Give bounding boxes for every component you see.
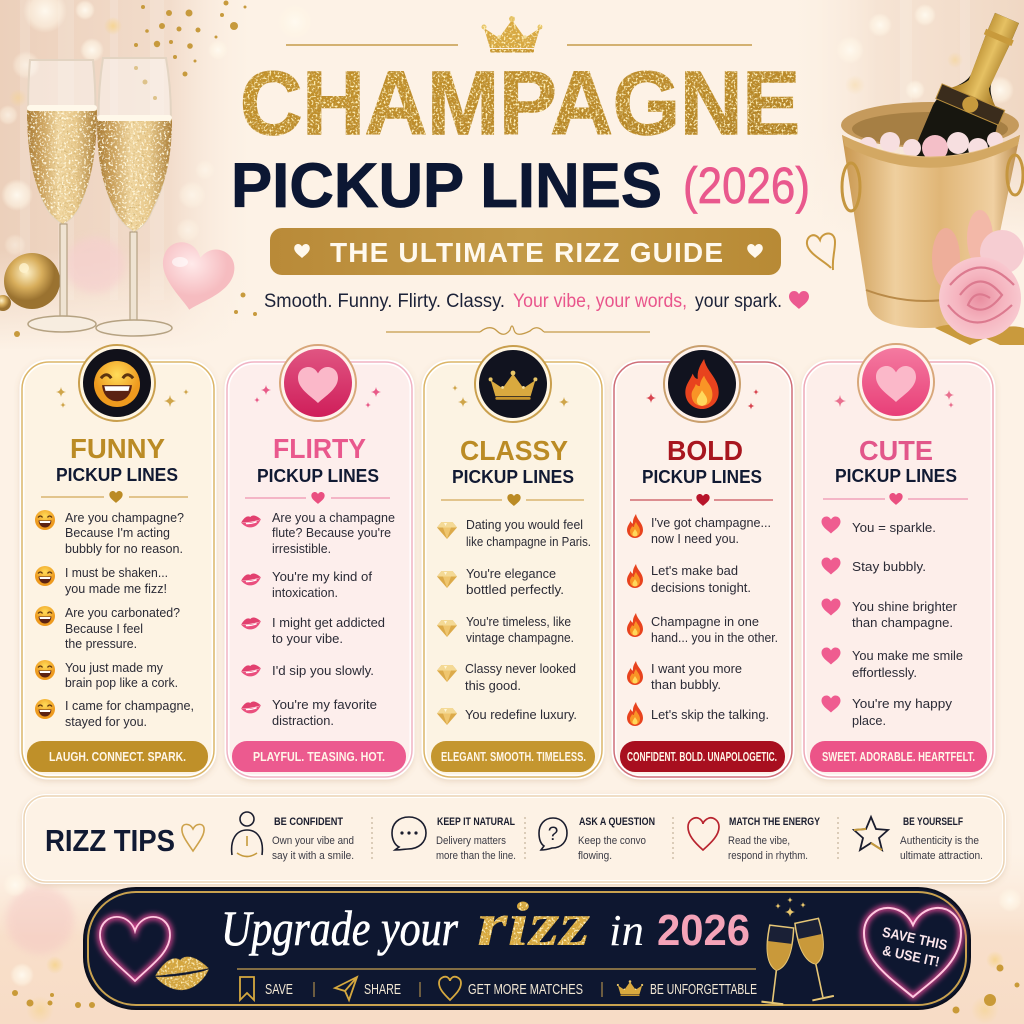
tip: keep it natural: more than the line.	[436, 850, 516, 862]
tip: keep it natural: Delivery matters	[436, 835, 506, 847]
classy heading: CLASSY	[460, 435, 568, 466]
bold lines	[627, 514, 778, 726]
icon: left neon heart	[100, 917, 170, 981]
bold lines: Let's make bad	[651, 563, 738, 578]
gold ornament ball	[0, 253, 60, 311]
cute lines: effortlessly.	[852, 665, 917, 680]
cute lines: Stay bubbly.	[852, 559, 926, 574]
flirty lines: intoxication.	[272, 585, 338, 600]
bold badge icon	[664, 346, 740, 422]
panel: cute	[804, 344, 993, 777]
funny lines: You just made my	[65, 660, 163, 675]
pink blob	[65, 237, 125, 293]
icon: right neon heart with callout	[864, 908, 961, 997]
tip: be confident: Own your vibe and	[272, 835, 354, 847]
flirty divider	[245, 492, 390, 504]
icon: right neon heart with callout: SAVE THIS	[881, 924, 949, 953]
title decorative rules	[286, 44, 752, 46]
tip: keep it natural	[392, 816, 516, 862]
tip: ask a question	[539, 816, 655, 862]
classy footer pill: ELEGANT. SMOOTH. TIMELESS.	[441, 749, 586, 764]
cute badge icon	[858, 344, 934, 420]
cute lines	[822, 516, 963, 728]
tip: be confident: BE CONFIDENT	[274, 816, 343, 828]
flirty footer pill	[232, 741, 406, 772]
panel: funny	[22, 345, 214, 777]
tip: ask a question: flowing.	[578, 850, 612, 862]
banner headline: rizz: rizz	[477, 891, 590, 959]
cute lines: You're my happy	[852, 696, 953, 711]
tagline	[264, 291, 809, 312]
cute lines: You make me smile	[852, 648, 963, 663]
banner action: save	[240, 977, 293, 1000]
funny badge icon	[79, 345, 155, 421]
icon: pink glass heart	[154, 239, 238, 317]
classy lines: Dating you would feel	[466, 517, 583, 532]
banner headline: year: 2026	[657, 906, 750, 955]
classy lines: this good.	[465, 678, 521, 693]
classy lines: vintage champagne.	[466, 630, 574, 645]
champagne flutes	[27, 58, 172, 336]
bold subheading: PICKUP LINES	[642, 467, 762, 487]
banner action: get more matches: GET MORE MATCHES	[468, 981, 583, 998]
title: pickup lines: PICKUP LINES	[231, 151, 662, 221]
classy lines	[437, 517, 591, 725]
icon: right neon heart with callout: & USE IT!	[881, 942, 941, 970]
tip dividers	[372, 817, 838, 860]
banner action: share: SHARE	[364, 981, 401, 998]
classy sparkles	[452, 385, 569, 407]
icon: gold outline heart	[807, 234, 835, 270]
funny sparkles	[56, 387, 189, 408]
flirty lines: irresistible.	[272, 541, 331, 556]
bold footer pill	[620, 741, 785, 772]
bold divider	[630, 494, 773, 506]
banner headline: in: in	[609, 906, 644, 955]
ice bucket with bottle and roses	[841, 5, 1024, 345]
panel: upgrade banner	[84, 888, 970, 1009]
tip: be yourself: Authenticity is the	[900, 835, 979, 847]
bold lines: hand... you in the other.	[651, 630, 778, 645]
title crown	[482, 16, 542, 52]
funny footer pill	[27, 741, 208, 772]
title: champagne: CHAMPAGNE	[240, 54, 800, 154]
funny lines: the pressure.	[65, 636, 137, 651]
classy lines: You're elegance	[466, 566, 556, 581]
funny footer pill: LAUGH. CONNECT. SPARK.	[49, 749, 186, 764]
flirty lines: to your vibe.	[272, 631, 343, 646]
flirty lines	[240, 510, 395, 728]
funny lines: I must be shaken...	[65, 565, 168, 580]
funny lines: I came for champagne,	[65, 698, 194, 713]
tip: match the energy	[688, 816, 821, 862]
tagline: Your vibe, your words,	[513, 291, 687, 312]
funny lines: brain pop like a cork.	[65, 675, 178, 690]
flirty lines: flute? Because you're	[272, 525, 391, 540]
tip: match the energy: Read the vibe,	[728, 835, 790, 847]
bold lines: than bubbly.	[651, 677, 721, 692]
bold lines: I've got champagne...	[651, 515, 771, 530]
classy subheading: PICKUP LINES	[452, 467, 574, 487]
cute divider	[823, 493, 968, 505]
tagline: your spark.	[695, 291, 782, 312]
panel: flirty	[227, 345, 412, 777]
classy divider	[441, 494, 584, 506]
classy badge icon	[475, 346, 551, 422]
icon: gold lips	[153, 954, 211, 994]
flirty sparkles	[254, 385, 381, 408]
cute lines: place.	[852, 713, 886, 728]
flirty heading: FLIRTY	[273, 433, 366, 464]
cute lines: You = sparkle.	[852, 520, 936, 535]
funny lines: Are you champagne?	[65, 510, 184, 525]
banner action: be unforgettable: BE UNFORGETTABLE	[650, 981, 757, 998]
banner action: share	[335, 977, 401, 1000]
flirty footer pill: PLAYFUL. TEASING. HOT.	[253, 749, 385, 764]
flirty lines: Are you a champagne	[272, 510, 395, 525]
bold footer pill: CONFIDENT. BOLD. UNAPOLOGETIC.	[627, 749, 777, 764]
banner headline: upgrade your: Upgrade your	[221, 900, 458, 956]
tips heading: RIZZ TIPS	[45, 823, 175, 858]
funny divider	[41, 491, 188, 503]
classy lines: You're timeless, like	[466, 614, 571, 629]
funny lines	[35, 510, 194, 729]
panel: bold	[614, 346, 792, 777]
tip: be confident: say it with a smile.	[272, 850, 354, 862]
banner action: save: SAVE	[265, 981, 293, 998]
flirty lines: distraction.	[272, 713, 334, 728]
funny subheading: PICKUP LINES	[56, 465, 178, 485]
panel: classy	[424, 346, 602, 777]
bold lines: I want you more	[651, 661, 742, 676]
tip: match the energy: respond in rhythm.	[728, 850, 808, 862]
funny lines: Are you carbonated?	[65, 605, 180, 620]
cute sparkles	[834, 390, 954, 408]
subtitle pill	[270, 228, 781, 275]
title: year: (2026)	[683, 157, 810, 214]
tip: be yourself: ultimate attraction.	[900, 850, 983, 862]
funny lines: you made me fizz!	[65, 581, 167, 596]
tip: be yourself	[854, 816, 983, 862]
icon: tips heart	[182, 824, 204, 851]
flirty badge icon	[280, 345, 356, 421]
bold lines: Champagne in one	[651, 614, 759, 629]
cute subheading: PICKUP LINES	[835, 466, 957, 486]
flirty subheading: PICKUP LINES	[257, 466, 379, 486]
banner action: be unforgettable	[617, 980, 757, 998]
tip: ask a question: ?	[548, 824, 558, 845]
tip: ask a question: ASK A QUESTION	[579, 816, 655, 828]
classy lines: like champagne in Paris.	[466, 534, 591, 549]
tip: match the energy: MATCH THE ENERGY	[729, 816, 821, 828]
subtitle pill: THE ULTIMATE RIZZ GUIDE	[330, 237, 723, 268]
bold lines: now I need you.	[651, 531, 739, 546]
classy lines: You redefine luxury.	[465, 707, 577, 722]
classy lines: bottled perfectly.	[466, 582, 564, 597]
flirty lines: I'd sip you slowly.	[272, 663, 374, 678]
gold dust sparkle cluster	[14, 0, 257, 337]
flirty lines: You're my kind of	[272, 569, 372, 584]
bold heading: BOLD	[667, 435, 743, 466]
icon: clinking glasses	[760, 897, 835, 1004]
bold sparkles	[646, 389, 759, 410]
funny lines: Because I feel	[65, 621, 143, 636]
panel: rizz tips	[24, 796, 1004, 882]
classy lines: Classy never looked	[465, 661, 576, 676]
cute heading: CUTE	[859, 435, 933, 466]
cute lines: than champagne.	[852, 615, 953, 630]
bold lines: decisions tonight.	[651, 580, 751, 595]
cute lines: You shine brighter	[852, 599, 958, 614]
tip: be yourself: BE YOURSELF	[903, 816, 963, 828]
flirty lines: You're my favorite	[272, 697, 377, 712]
funny lines: stayed for you.	[65, 714, 147, 729]
cute footer pill	[810, 741, 987, 772]
tagline: Smooth. Funny. Flirty. Classy.	[264, 291, 505, 312]
bold lines: Let's skip the talking.	[651, 707, 769, 722]
classy footer pill	[431, 741, 595, 772]
funny heading: FUNNY	[70, 433, 165, 464]
funny lines: bubbly for no reason.	[65, 541, 183, 556]
tip: ask a question: Keep the convo	[578, 835, 646, 847]
funny lines: Because I'm acting	[65, 525, 170, 540]
banner action: get more matches	[439, 977, 583, 1000]
tip: keep it natural: KEEP IT NATURAL	[437, 816, 515, 828]
tip: be confident	[232, 812, 354, 862]
decorative flourish	[386, 326, 650, 334]
flirty lines: I might get addicted	[272, 615, 385, 630]
